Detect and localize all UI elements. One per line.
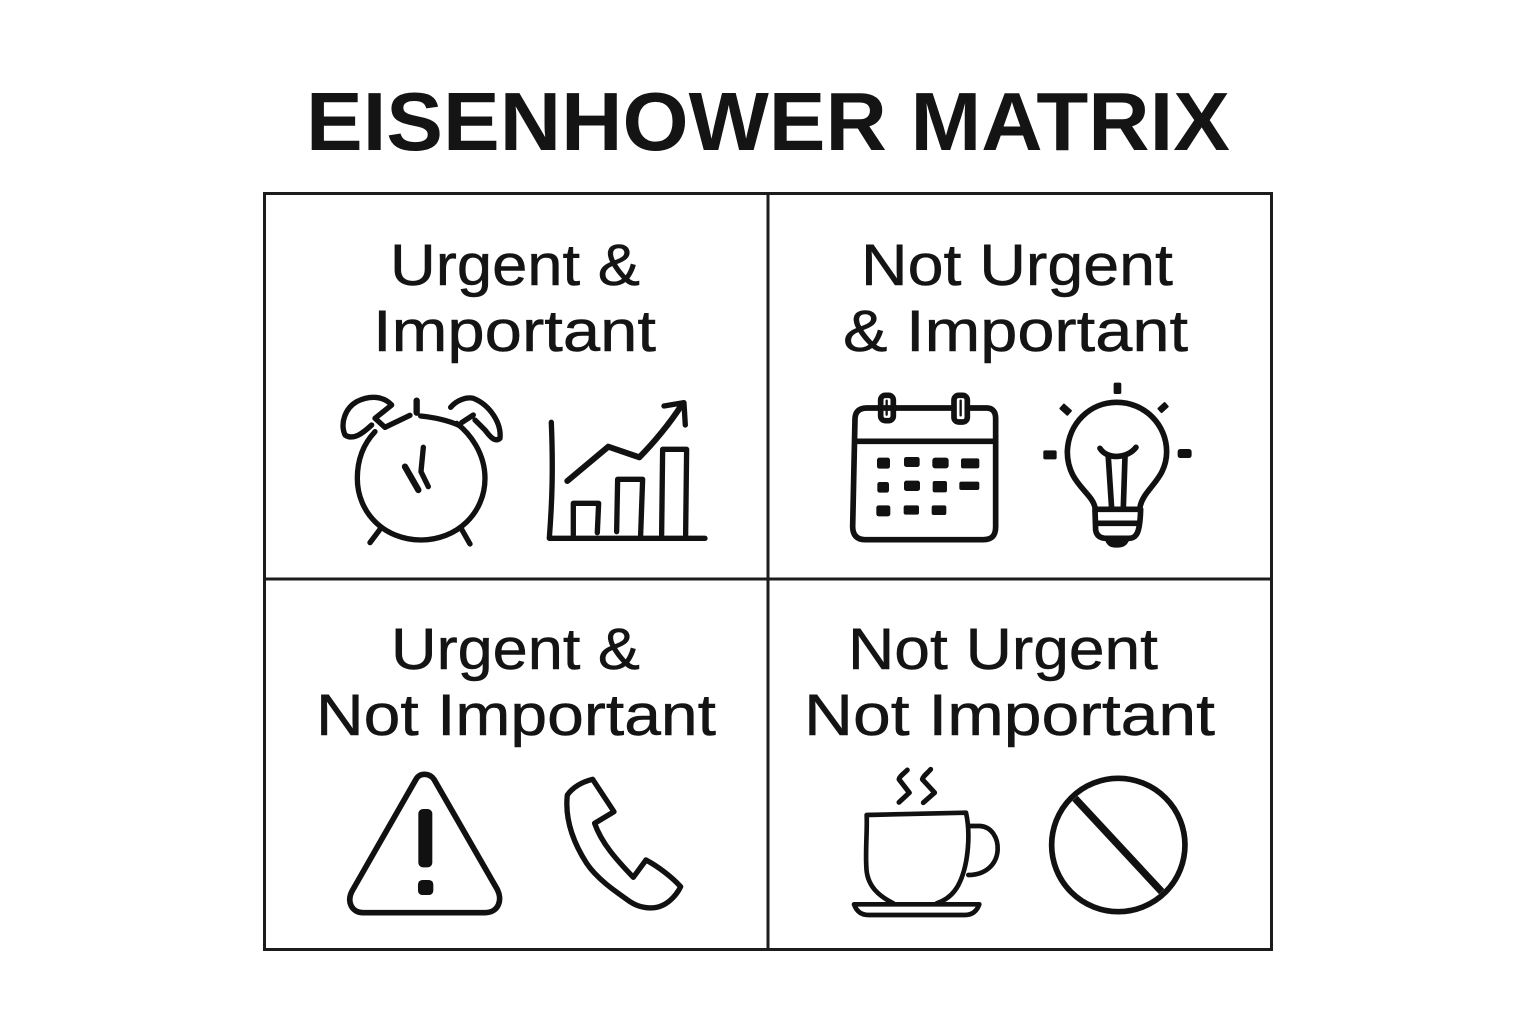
icon: light bulb [1043,383,1192,548]
heading: urgent and important: Important [373,299,656,364]
heading: urgent and important: Urgent & [390,233,640,298]
heading: urgent and important [373,233,656,364]
heading: urgent and not important [316,617,716,748]
icon: calendar [853,395,996,540]
panel: urgent and important [343,233,705,544]
icon: telephone [567,779,681,908]
heading: not urgent and important: Not Urgent [861,233,1173,298]
icon: prohibited sign [1052,778,1185,912]
heading: not urgent and important [843,233,1188,364]
icon: growth bar chart [549,403,705,538]
heading: not urgent not important [804,617,1215,748]
icon: alarm clock [343,397,500,544]
heading: not urgent not important: Not Urgent [848,617,1158,682]
panel: not urgent and not important [804,617,1215,915]
title: EISENHOWER MATRIX [306,75,1230,168]
icon: coffee cup [854,769,998,915]
heading: not urgent and important: & Important [843,299,1188,364]
heading: urgent and not important: Not Important [316,683,716,748]
panel: urgent and not important [316,617,716,913]
heading: urgent and not important: Urgent & [391,617,640,682]
heading: not urgent not important: Not Important [804,683,1215,748]
icon: warning triangle [350,774,500,913]
matrix grid [264,193,1272,950]
panel: not urgent and important [843,233,1192,548]
